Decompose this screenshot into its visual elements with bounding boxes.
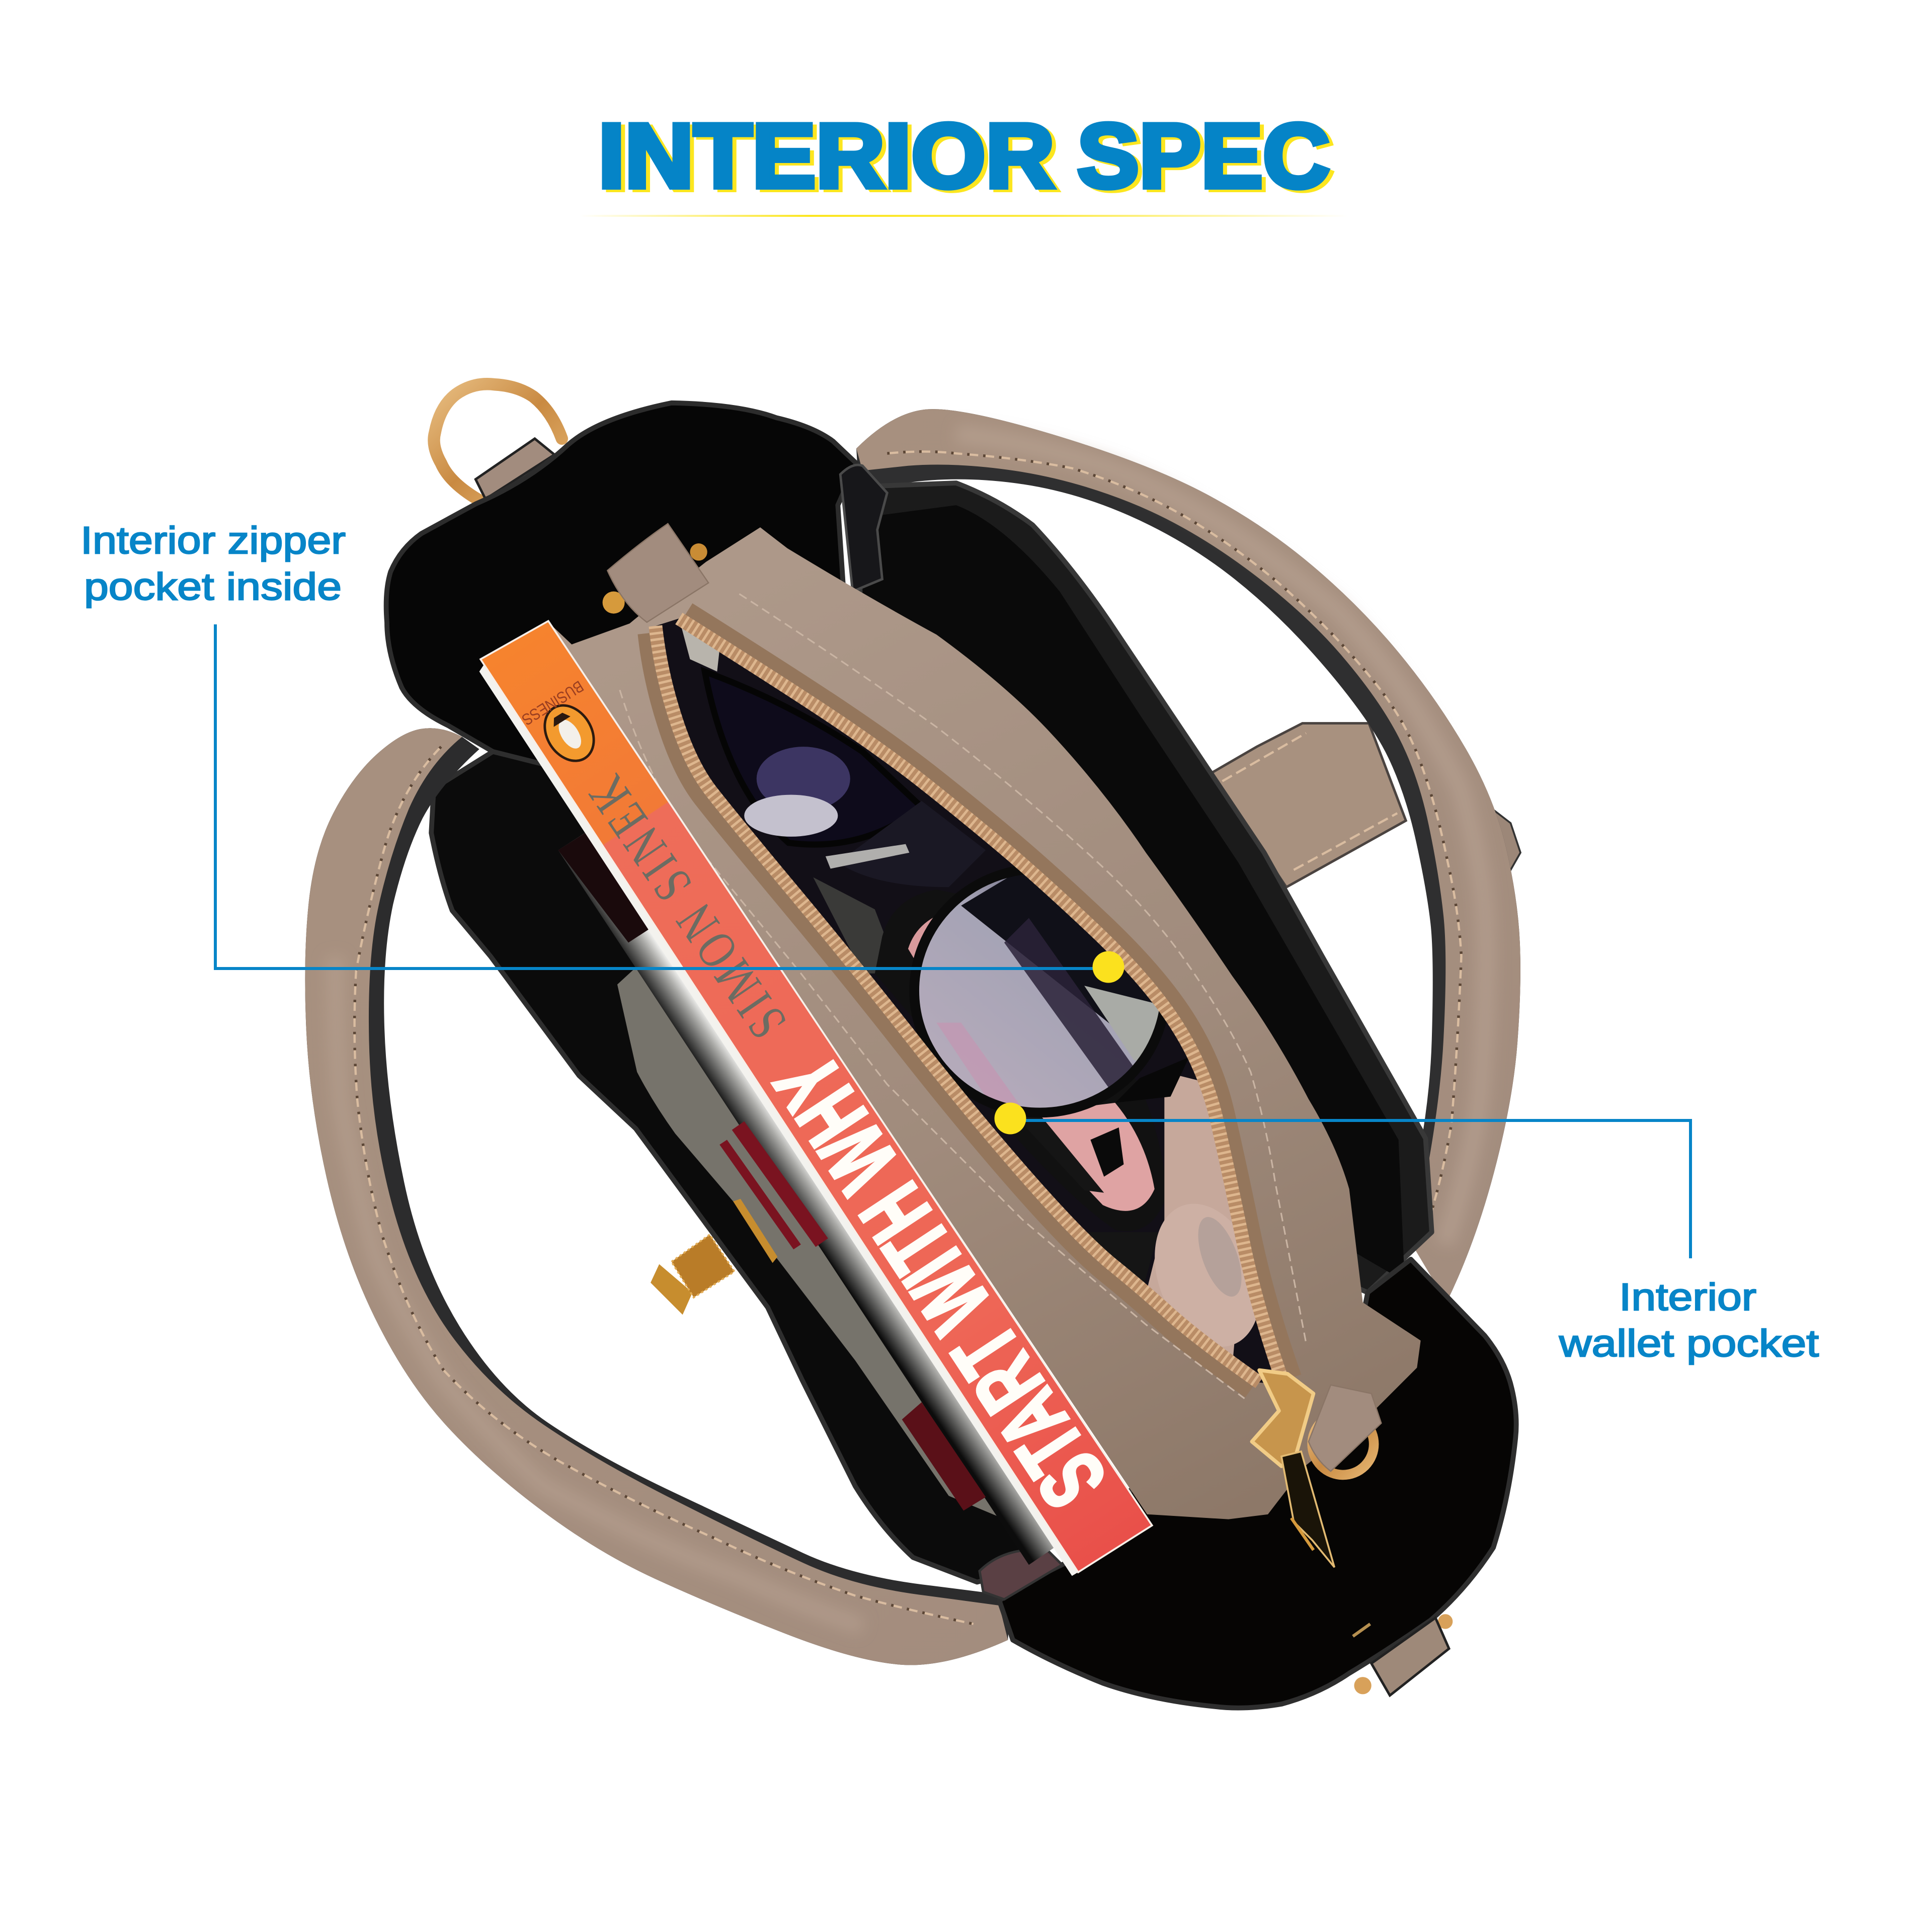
pouch body [548, 527, 1421, 1519]
callout line: zipper pocket [215, 624, 1097, 969]
d-ring top [434, 384, 562, 500]
sunglasses body [838, 801, 986, 887]
marker dot: wallet pocket [994, 1103, 1026, 1134]
sunglasses dark lens [705, 672, 922, 845]
left lining panel [431, 752, 1048, 1582]
penguin logo [535, 696, 604, 770]
jar and pink items [1084, 1072, 1279, 1367]
fabric tag [682, 628, 719, 672]
bag photograph [305, 384, 1520, 1708]
temple clip [826, 844, 909, 869]
callout line: wallet pocket [1011, 1120, 1691, 1258]
exterior side sliver [622, 1115, 782, 1307]
strap tab top [475, 439, 554, 499]
label: interior zipper pocket inside: pocket inside [84, 566, 342, 608]
left handle [305, 728, 1010, 1665]
herringbone pocket [813, 877, 883, 974]
gold clasp plate [733, 1199, 777, 1263]
book spine [480, 621, 1152, 1572]
book page edge [479, 664, 1078, 1576]
herringbone lining [617, 956, 1048, 1528]
bottom strap tab and rivets [1354, 1614, 1453, 1696]
title: SPEC [1081, 108, 1334, 209]
book [479, 621, 1152, 1576]
title: SPEC [1077, 105, 1330, 207]
author name: SIMON SINEK [574, 761, 798, 1049]
pouch seam stitching [620, 594, 1306, 1399]
pouch opening with contents [656, 619, 1272, 1383]
infographic canvas [84, 121, 1819, 1711]
title: INTERIOR [598, 105, 1055, 207]
title [598, 105, 1334, 209]
back strap [1210, 723, 1406, 887]
bottom lining panel [999, 1259, 1516, 1708]
red stripes on cover [558, 831, 986, 1510]
strap loop tab near top [603, 524, 708, 622]
side strap peek [1495, 811, 1520, 870]
zipper pull and ring [1252, 1370, 1381, 1567]
label: interior zipper pocket inside: Interior zipper [80, 519, 346, 562]
wallet pink edge [908, 909, 1155, 1211]
right handle [856, 409, 1520, 1303]
wallet outer [874, 932, 900, 974]
marker dot: zipper pocket [1093, 951, 1124, 983]
zipper upper [679, 611, 1293, 1385]
top lining panel [386, 403, 862, 862]
clasp [651, 1235, 735, 1315]
zipper lower [647, 626, 1259, 1390]
book back cover edge [558, 831, 1060, 1565]
publisher label: BUSINESS [519, 677, 587, 729]
title: INTERIOR [602, 108, 1059, 209]
label: interior wallet pocket: Interior [1619, 1276, 1756, 1319]
right lining panel [840, 465, 1432, 1293]
label: interior wallet pocket: wallet pocket [1559, 1322, 1819, 1365]
handle attachment bottom [980, 1550, 1062, 1599]
clear glasses lens [912, 862, 1189, 1121]
book title: START WITH WHY [756, 1037, 1125, 1525]
